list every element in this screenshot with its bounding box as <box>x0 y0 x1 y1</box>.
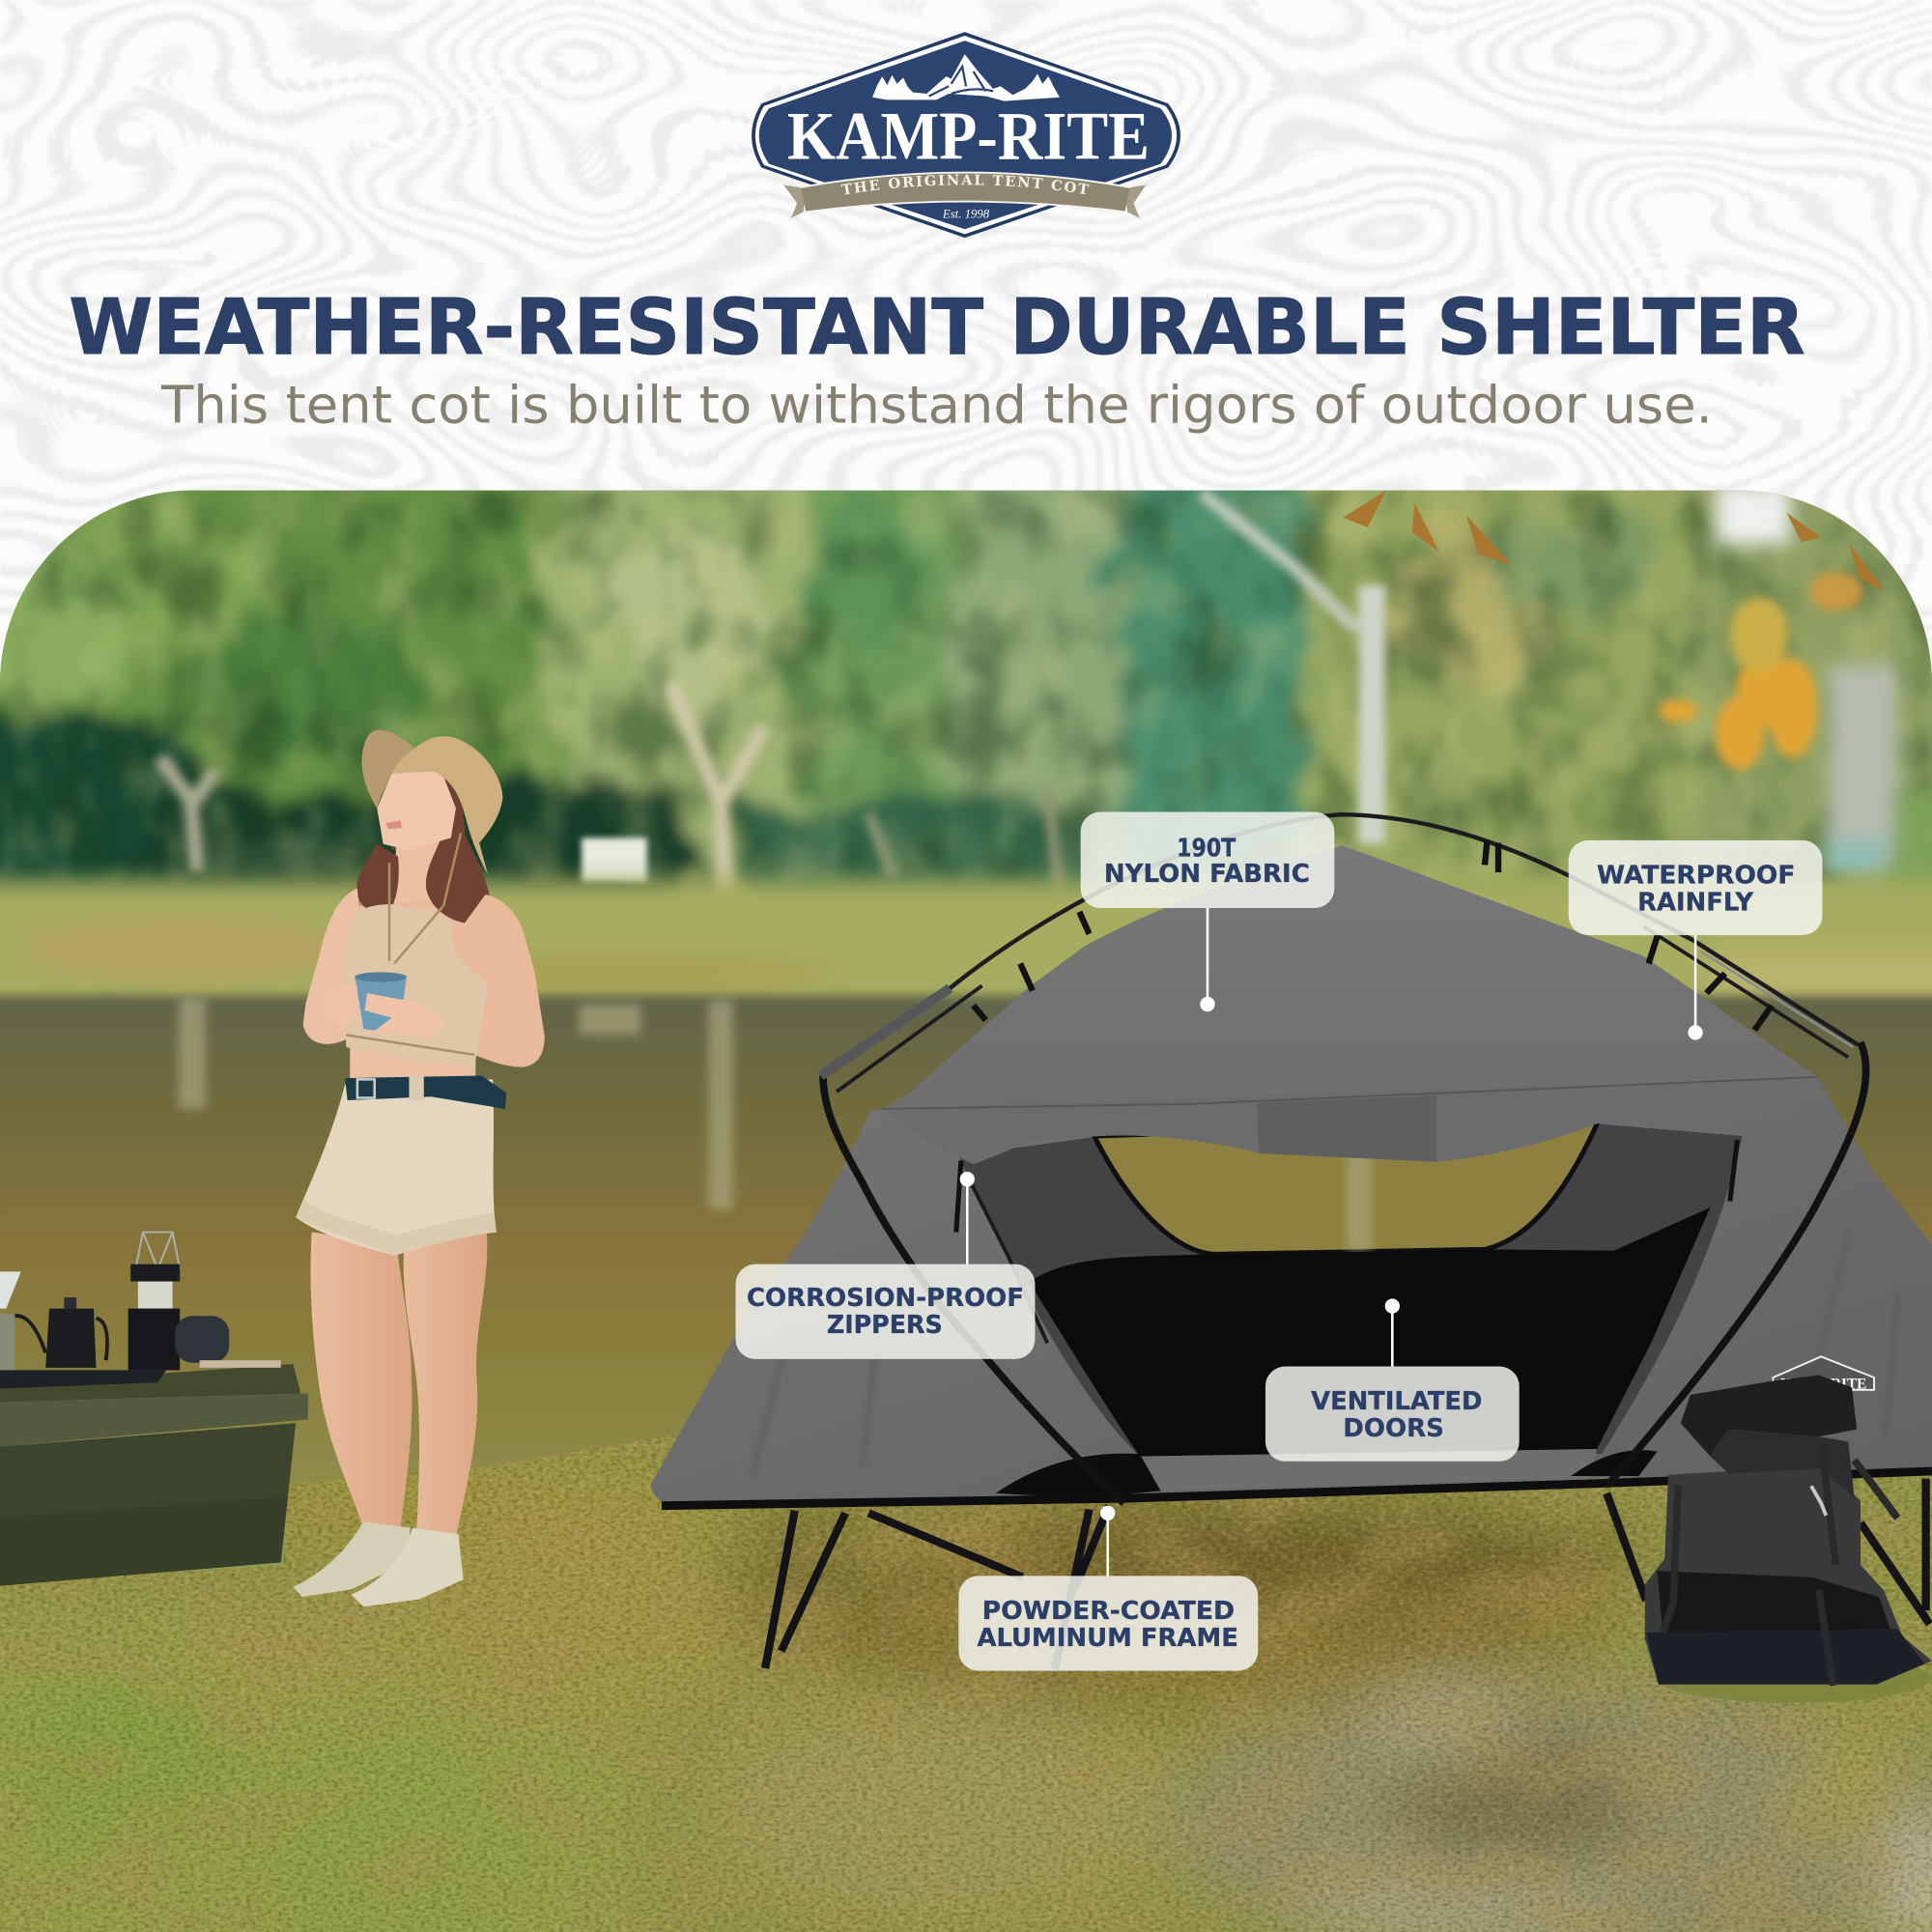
callout: powder-coated aluminum frame: POWDER-COATED <box>982 1597 1235 1626</box>
frame arches <box>823 1042 1866 1503</box>
callout: waterproof rainfly: WATERPROOF <box>1597 862 1795 891</box>
arm right <box>397 895 545 1067</box>
cot rail <box>662 1471 1932 1506</box>
logo ribbon <box>783 172 1146 218</box>
neck <box>392 838 443 918</box>
mesh window showing lake <box>1094 1119 1600 1254</box>
hat <box>361 730 502 875</box>
callout: corrosion-proof zippers <box>735 1172 1035 1359</box>
callout: waterproof rainfly <box>1569 840 1822 1040</box>
accessory case <box>175 1316 229 1363</box>
legs <box>765 1479 1929 1669</box>
callout: 190T nylon fabric <box>1081 812 1334 1011</box>
kettle <box>45 1309 96 1368</box>
legs <box>311 1233 412 1528</box>
door interior walls <box>958 1123 1743 1457</box>
callout: corrosion-proof zippers: ZIPPERS <box>827 1311 943 1340</box>
door zippers <box>956 1140 1737 1233</box>
callout: powder-coated aluminum frame <box>958 1506 1258 1671</box>
backpack neck <box>1710 1430 1855 1497</box>
tray <box>0 1370 166 1389</box>
scene: tree foliage mottling <box>0 491 1932 885</box>
face <box>377 770 456 850</box>
backpack main body <box>1645 1462 1932 1685</box>
scene: grass patch under backpack <box>1655 1654 1931 1703</box>
logo: Kamp-Rite badge <box>752 32 1180 238</box>
shoes <box>294 1521 411 1597</box>
backpack straps <box>1663 1441 1897 1686</box>
scene: blurred tree line <box>0 491 1932 895</box>
phone <box>200 1360 281 1368</box>
arm left <box>303 889 362 1044</box>
scene: lake <box>0 996 1932 1501</box>
reflection through window <box>1347 1152 1372 1251</box>
backpack lid <box>1681 1375 1857 1457</box>
callout: 190T nylon fabric: NYLON FABRIC <box>1104 860 1310 889</box>
tent logo <box>1773 1356 1874 1393</box>
callout: waterproof rainfly: RAINFLY <box>1637 889 1754 918</box>
tent cot <box>650 814 1932 1669</box>
scene: sky gap and distant building <box>1716 483 1932 912</box>
lantern <box>128 1233 180 1370</box>
hair <box>357 828 490 924</box>
roof poles <box>820 814 1858 1092</box>
midriff <box>350 1045 475 1090</box>
corner pads <box>996 1450 1658 1498</box>
scene: tree foliage highlights <box>0 491 1932 885</box>
hands <box>324 984 446 1037</box>
backpack buckle <box>1811 1486 1826 1516</box>
rear fly and sides <box>650 1077 1932 1506</box>
hair behind head <box>389 766 466 853</box>
title: WEATHER-RESISTANT DURABLE SHELTER <box>69 283 1805 372</box>
tent floor <box>1140 1449 1597 1491</box>
scene: lake reflections <box>179 998 1372 1257</box>
chin strap <box>389 833 461 963</box>
awning pocket <box>1257 1095 1436 1162</box>
backpack bottom <box>1646 1629 1924 1685</box>
coffee dripper <box>0 1271 21 1309</box>
logo wordmark: KAMP-RITE <box>787 99 1150 175</box>
valance <box>882 1077 1817 1164</box>
shorts <box>296 1079 497 1256</box>
callout: corrosion-proof zippers: CORROSION-PROOF <box>747 1284 1024 1313</box>
mug <box>355 972 407 1030</box>
callout: ventilated doors <box>1265 1298 1520 1462</box>
tent logo: KAMP-RITE <box>1780 1376 1866 1392</box>
callout: ventilated doors: VENTILATED <box>1311 1387 1482 1416</box>
woman with mug <box>294 730 545 1606</box>
scene: orange leaves <box>1659 572 1863 770</box>
scene: grass bank <box>0 880 1932 1060</box>
roof <box>882 845 1817 1115</box>
box <box>0 1364 308 1586</box>
scene: tree trunks <box>160 493 1385 918</box>
subtitle: This tent cot is built to withstand the rigors of outdoor use. <box>160 374 1713 435</box>
backpack <box>1645 1375 1932 1686</box>
backpack middle pocket <box>1658 1571 1891 1641</box>
scene: foreground ground <box>0 1417 1932 1932</box>
logo ribbon: THE ORIGINAL TENT COT <box>840 174 1090 195</box>
sleeping pad <box>1029 1208 1710 1457</box>
scene: hanging branch leaves <box>1343 491 1886 591</box>
scene: distant sign <box>582 838 647 882</box>
callout: ventilated doors: DOORS <box>1343 1414 1444 1443</box>
fly fold lines <box>752 1233 1897 1479</box>
belt <box>345 1076 506 1109</box>
callout: powder-coated aluminum frame: ALUMINUM FRAME <box>977 1624 1238 1653</box>
tank top <box>343 904 488 1067</box>
icon: mountains and trees <box>872 54 1060 101</box>
callout: 190T nylon fabric: 190T <box>1177 834 1236 863</box>
chest skin <box>352 897 496 1025</box>
background: topographic contour pattern <box>0 0 1932 739</box>
logo established date: Est. 1998 <box>942 208 990 221</box>
panel: photo scene <box>0 419 1932 1932</box>
storage box with camp gear <box>0 1233 308 1586</box>
